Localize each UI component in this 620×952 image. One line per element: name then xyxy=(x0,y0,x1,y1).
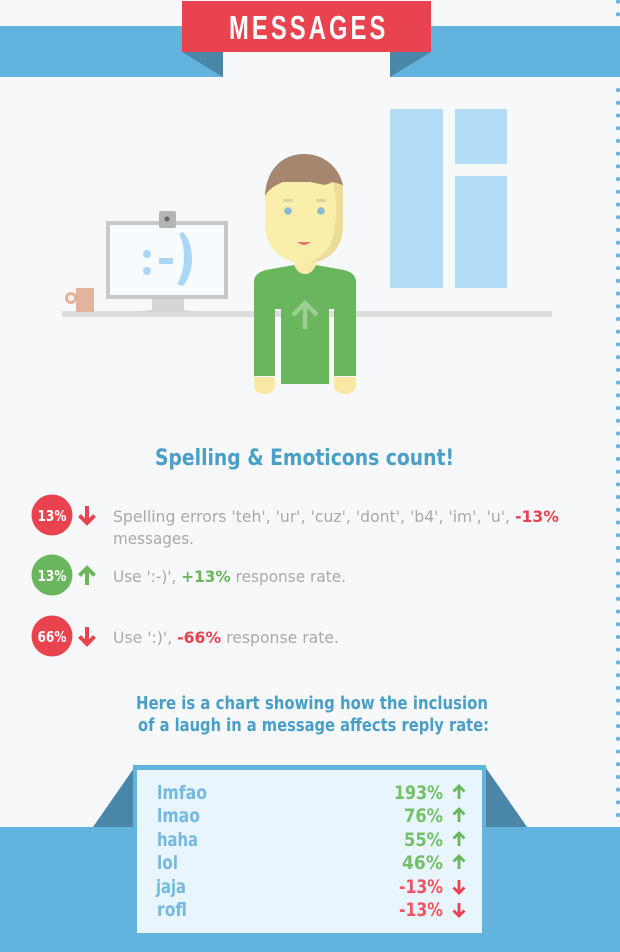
stat: spelling errors xyxy=(32,494,559,548)
hair xyxy=(265,154,343,196)
sweater xyxy=(254,265,356,384)
neck xyxy=(294,258,316,274)
header banner xyxy=(0,1,620,77)
illustration: window xyxy=(390,109,507,288)
row: lmfao: lmfao xyxy=(157,782,207,804)
illustration: desk xyxy=(62,311,552,317)
sweater arrow xyxy=(293,303,317,329)
stat: emoticon with nose: Use ':-)', +13% response rate. xyxy=(113,567,346,586)
laugh chart card xyxy=(93,765,527,933)
row: lmao xyxy=(157,805,464,827)
row: lmao: lmao xyxy=(157,805,200,827)
hands xyxy=(254,377,275,394)
head xyxy=(265,155,343,263)
row: rofl: rofl xyxy=(157,899,187,921)
illustration: coffee mug xyxy=(66,288,94,312)
illustration: computer monitor with emoticon xyxy=(108,211,226,312)
chart intro text: Here is a chart showing how the inclusion xyxy=(136,694,488,714)
row: rofl: -13% xyxy=(399,899,443,921)
row: jaja: jaja xyxy=(155,876,186,898)
stat: spelling errors: Spelling errors 'teh', 'ur', 'cuz', 'dont', 'b4', 'im', 'u', -13% xyxy=(113,507,559,526)
row: haha: 55% xyxy=(404,829,443,851)
row: rofl xyxy=(157,899,464,921)
stat: emoticon without nose xyxy=(32,616,339,656)
title: MESSAGES xyxy=(229,10,388,47)
stat: spelling errors: messages. xyxy=(113,529,194,548)
footer band xyxy=(0,827,620,952)
row: jaja xyxy=(155,876,464,898)
stat: emoticon without nose: 66% xyxy=(38,628,67,646)
row: lol xyxy=(157,852,464,874)
heading: Spelling & Emoticons count! xyxy=(155,446,454,471)
stat: emoticon without nose: Use ':)', -66% response rate. xyxy=(113,628,339,647)
chart intro text xyxy=(136,694,489,736)
chart intro text: of a laugh in a message affects reply rate: xyxy=(138,716,489,736)
row: lmfao: 193% xyxy=(394,782,443,804)
row: haha xyxy=(157,829,464,851)
row: jaja: -13% xyxy=(399,876,443,898)
stat: emoticon with nose xyxy=(32,554,346,596)
stat: spelling errors: 13% xyxy=(38,507,67,525)
row: lol: lol xyxy=(157,852,178,874)
row: lmfao xyxy=(157,782,464,804)
eyes and mouth xyxy=(283,199,293,202)
illustration: person xyxy=(254,154,356,394)
row: lol: 46% xyxy=(402,852,443,874)
row: lmao: 76% xyxy=(404,805,443,827)
row: haha: haha xyxy=(157,829,198,851)
stat: emoticon with nose: 13% xyxy=(38,567,67,585)
